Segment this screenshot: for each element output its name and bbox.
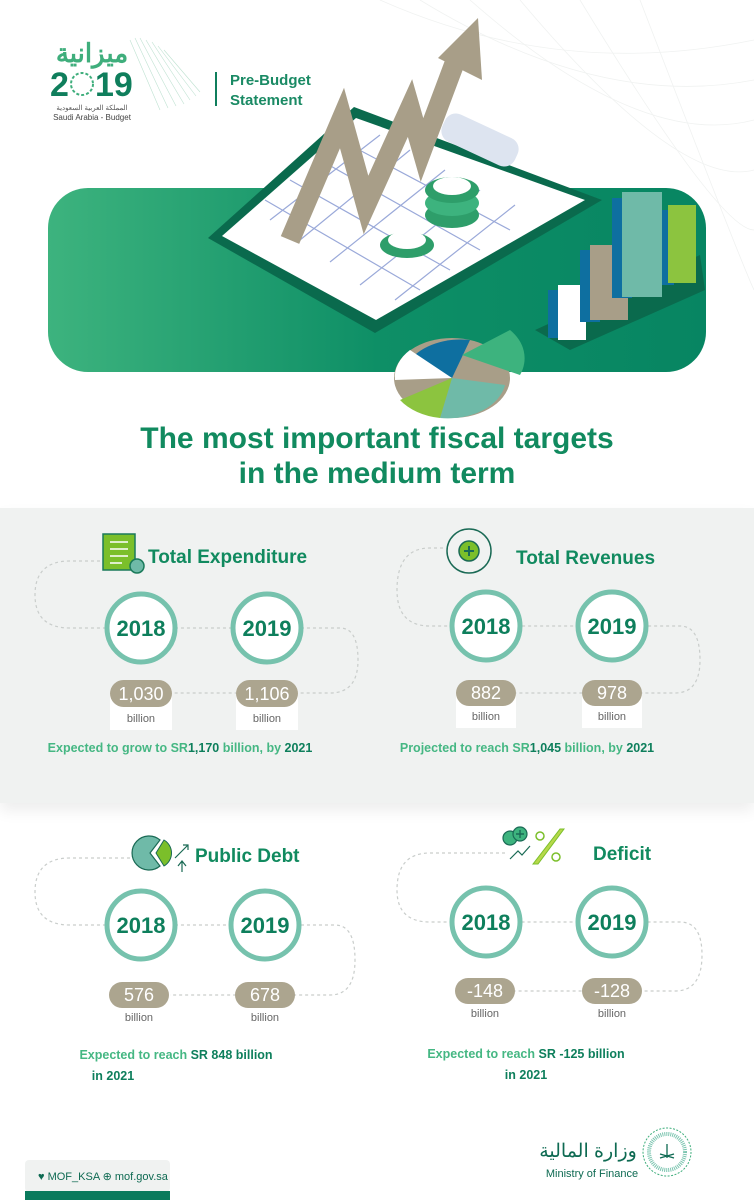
- heading: Deficit: [593, 844, 652, 865]
- decorative wave lines: [380, 0, 754, 290]
- panel: public debt: 678: [250, 985, 280, 1005]
- illustration: pie chart: [394, 330, 525, 418]
- panel: public debt: billion: [125, 1012, 153, 1024]
- panel: total revenues: 978: [597, 683, 627, 703]
- panel: public debt: Expected to reach SR 848 billion: [79, 1048, 273, 1062]
- panel: total expenditure: [35, 534, 358, 755]
- gray band background: [0, 508, 754, 803]
- footer: ministry of finance logo: وزارة المالية: [539, 1141, 637, 1162]
- panel: total revenues: 2019: [588, 614, 636, 639]
- panel: total expenditure: billion: [253, 713, 281, 725]
- panel: deficit: -148: [467, 981, 503, 1001]
- panel: total revenues: [397, 529, 700, 755]
- logo: budget 2019: 2: [50, 66, 69, 104]
- heading: Total Revenues: [516, 548, 655, 569]
- panel: public debt: billion: [251, 1012, 279, 1024]
- logo: budget 2019: المملكة العربية السعودية: [56, 104, 128, 112]
- banner: green rounded: [48, 18, 706, 418]
- illustration: clipboard: [208, 107, 602, 333]
- heading: Total Expenditure: [148, 547, 307, 568]
- icon: pie with arrows: [132, 836, 188, 872]
- panel: total expenditure: 2019: [243, 616, 291, 641]
- panel: total revenues: billion: [472, 711, 500, 723]
- panel: total expenditure: 2018: [117, 616, 165, 641]
- logo: budget 2019: ميزانية: [56, 38, 128, 69]
- logo: budget 2019: Saudi Arabia - Budget: [53, 113, 132, 122]
- icon: revenue cycle: [447, 529, 491, 573]
- panel: total expenditure: 1,106: [244, 684, 290, 704]
- panel: total revenues: Projected to reach SR1,045 billion, by 2021: [400, 741, 654, 755]
- illustration: coins: [380, 177, 479, 258]
- icon: percent: [503, 827, 564, 864]
- panel: public debt: 2019: [241, 913, 289, 938]
- icon: document: [103, 534, 144, 573]
- subtitle: Pre-Budget Statement: [215, 72, 311, 109]
- panel: deficit: 2018: [462, 910, 510, 935]
- heading: Public Debt: [195, 846, 300, 867]
- panel: deficit: billion: [598, 1008, 626, 1020]
- panel: deficit: -128: [594, 981, 630, 1001]
- illustration: bar chart: [535, 192, 705, 350]
- panel: total revenues: billion: [598, 711, 626, 723]
- panel: total revenues: 882: [471, 683, 501, 703]
- title: in the medium term: [239, 457, 515, 490]
- panel: total expenditure: Expected to grow to SR1,170 billion, by 2021: [48, 741, 312, 755]
- footer: ministry of finance logo: [539, 1128, 691, 1180]
- panel: deficit: in 2021: [505, 1068, 547, 1082]
- panel: public debt: [35, 836, 355, 1083]
- panel: public debt: 2018: [117, 913, 165, 938]
- subtitle: Pre-Budget Statement: Statement: [230, 92, 303, 109]
- illustration: zigzag arrow: [290, 18, 482, 240]
- panel: total expenditure: 1,030: [118, 684, 164, 704]
- panel: deficit: [397, 827, 702, 1082]
- footer: ministry of finance logo: Ministry of Finance: [546, 1168, 638, 1180]
- footer: social links: [25, 1160, 170, 1200]
- panel: total expenditure: billion: [127, 713, 155, 725]
- title: The most important fiscal targets: [140, 422, 614, 455]
- logo: budget 2019: 19: [95, 66, 133, 104]
- panel: public debt: in 2021: [92, 1069, 134, 1083]
- title: [140, 422, 614, 490]
- panel: deficit: 2019: [588, 910, 636, 935]
- panel: deficit: billion: [471, 1008, 499, 1020]
- footer: social links: ♥ MOF_KSA ⊕ mof.gov.sa: [38, 1171, 169, 1183]
- panel: total revenues: 2018: [462, 614, 510, 639]
- subtitle: Pre-Budget Statement: Pre-Budget: [230, 72, 311, 89]
- logo: budget 2019: [50, 38, 200, 122]
- panel: deficit: Expected to reach SR -125 billion: [427, 1047, 625, 1061]
- panel: public debt: 576: [124, 985, 154, 1005]
